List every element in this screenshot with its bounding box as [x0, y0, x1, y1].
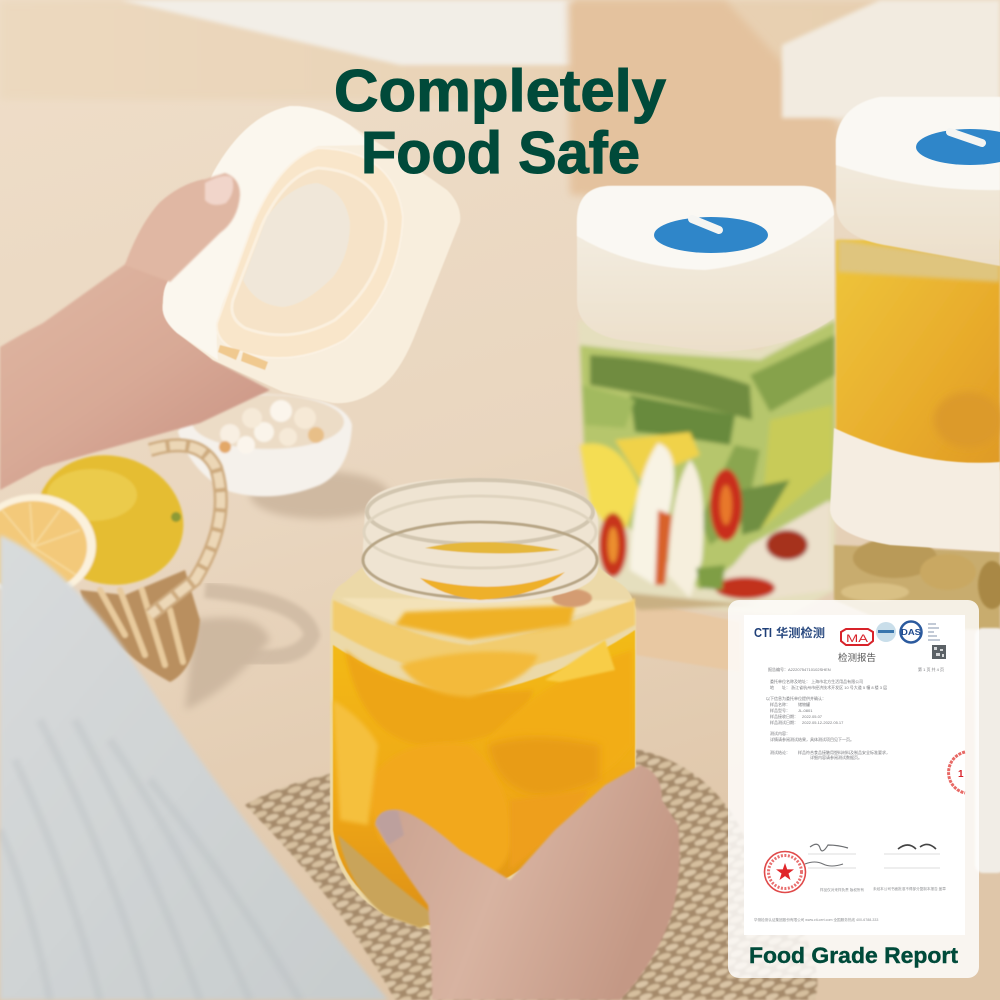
CTI logo: [754, 625, 825, 640]
report body text: 第 1 页 共 4 页: [918, 666, 944, 672]
CTI logo: CTI: [754, 626, 772, 640]
jar neck and rim: [362, 478, 598, 603]
lemon pieces: [345, 650, 533, 745]
lid white side band: [163, 106, 372, 360]
basket with lemons: [0, 439, 221, 682]
report body text: 地 址： 浙江省杭州市经济技术开发区 10 号大道 5 幢 8 楼 3 层: [770, 684, 887, 690]
signature lines: [805, 844, 940, 868]
accreditation badges: DAS: [901, 628, 922, 637]
report footer text: 华测检测认证集团股份有限公司 www.cti-cert.com 全国服务热线 400-6788-333: [754, 917, 878, 922]
CMA red logo: MA: [846, 633, 869, 645]
headline: Completely: [334, 58, 666, 124]
lid center disc: [243, 183, 350, 307]
accreditation badges: [876, 622, 940, 642]
red round stamp with star: [764, 852, 806, 892]
red stamp top right: [949, 752, 965, 793]
tall jar lid with blue valve: [836, 97, 1000, 266]
report body text: 样品名称： 储物罐: [770, 701, 810, 707]
thumb over lid: [125, 173, 240, 282]
lemon slice: [0, 494, 96, 598]
report body text: 样品型号： JL-0801: [770, 707, 813, 713]
report caption: Food Grade Report: [749, 943, 959, 968]
panel: food grade report card: [728, 600, 979, 978]
report body text: 测试结论： 样品符合食品接触用塑料材料及制品安全标准要求，: [770, 749, 890, 755]
lid inner rings: [217, 148, 403, 358]
report footer text: 未经本公司书面批准不得部分复制本报告 盖章: [873, 886, 946, 891]
report body text: 以下信息为委托单位提供并确认：: [766, 695, 826, 701]
report body text: 测试内容：: [770, 730, 790, 736]
headline: Food Safe: [361, 120, 640, 186]
headline: [334, 58, 666, 186]
report body text: 样品测试日期： 2022.05.12-2022.05.17: [770, 719, 844, 725]
report body text: 详情请参阅测试结果，具体测试项目见下一页。: [770, 736, 854, 742]
report document page: [744, 615, 965, 935]
lower hand holding jar: [375, 765, 680, 1000]
bowl of pearl onions: [178, 394, 352, 496]
jar lid with blue valve: [577, 186, 834, 352]
wooden board under jar: [630, 600, 740, 672]
lemon whole: [22, 439, 198, 601]
white dish behind report: [975, 628, 1000, 873]
CTI logo: 华测检测: [776, 625, 825, 640]
glass jar with pickled vegetables: [578, 300, 835, 615]
woven mat: [245, 750, 817, 1000]
report body text: 报告编号：A2220754710102SHEN: [768, 666, 831, 672]
report footer text: 样品仅对来样负责 版权所有: [820, 887, 865, 892]
report title: 检测报告: [838, 652, 876, 664]
report body text: 详细内容请参阅测试数据页。: [810, 754, 862, 760]
tall honey jar on right: [830, 97, 1000, 630]
main glass jar with lemons in honey: [330, 478, 636, 930]
report footer text: [754, 886, 946, 922]
raised lid seen from below: [163, 106, 460, 403]
red stamp top right: 1: [958, 769, 964, 780]
report body text: 样品接收日期： 2022.05.07: [770, 713, 823, 719]
striped sweater sleeve: [0, 535, 388, 1000]
left hand and forearm holding lid: [0, 180, 270, 490]
report body text: [766, 666, 944, 760]
CMA red logo: [841, 629, 873, 645]
report body text: 委托单位名称及地址： 上海市北方生活用品有限公司: [770, 678, 863, 684]
QR code: [932, 645, 946, 659]
glass shoulder: [333, 598, 635, 680]
